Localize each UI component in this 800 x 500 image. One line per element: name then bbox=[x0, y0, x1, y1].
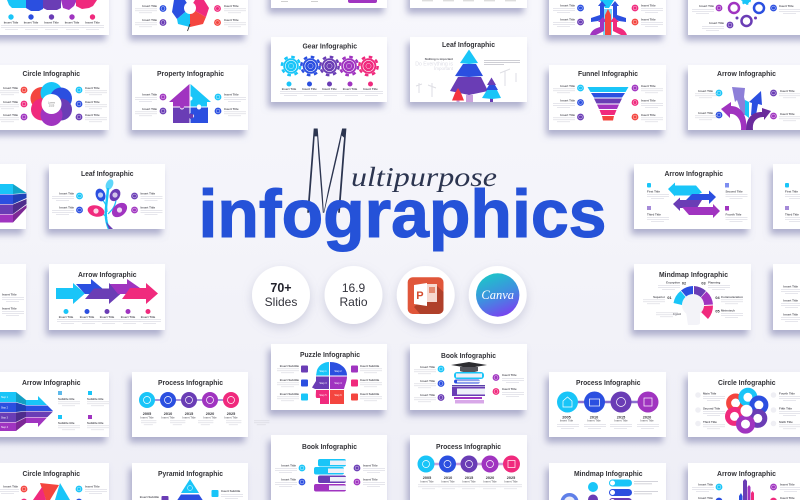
years and text: 2005 bbox=[423, 476, 431, 480]
left items: Insert Title bbox=[142, 92, 157, 96]
panel: top gear slide bbox=[688, 0, 800, 35]
left items: Second Title bbox=[703, 406, 721, 410]
items: Insert Title bbox=[85, 484, 100, 488]
pyramid labels bbox=[140, 489, 243, 500]
badge: Canva icon bbox=[469, 266, 527, 324]
years and text: 2020 bbox=[206, 412, 214, 416]
right items bbox=[771, 392, 800, 429]
puzzle labels: Insert Title bbox=[85, 20, 100, 24]
books and cap bbox=[451, 362, 487, 404]
wind turbines bbox=[416, 69, 516, 97]
badge: 70+ slides: Slides bbox=[265, 295, 297, 309]
right items: Insert Title bbox=[85, 100, 100, 104]
right items: Insert Title bbox=[641, 84, 656, 88]
panel: top partial slide 2 bbox=[410, 0, 527, 8]
head puzzle: Step 5 bbox=[319, 394, 327, 397]
item circles: Insert Title bbox=[779, 4, 794, 8]
items: Insert Title bbox=[780, 496, 795, 500]
years and text: 2020 bbox=[643, 416, 651, 420]
upward bars bbox=[739, 479, 754, 500]
chevron labels: Insert Title bbox=[121, 315, 136, 319]
heading: Process Infographic bbox=[158, 378, 223, 387]
left items: Insert Title bbox=[560, 4, 575, 8]
panel: process infographic 4 steps bbox=[549, 372, 666, 437]
strip labels: Insert Title bbox=[783, 284, 798, 288]
right items: Insert Subtitle bbox=[360, 364, 380, 368]
chevron labels: Insert Title bbox=[100, 315, 115, 319]
donut labels: Communication bbox=[721, 295, 743, 299]
head puzzle: Step 2 bbox=[334, 370, 342, 373]
panel: top puzzle slide bbox=[0, 0, 109, 35]
left items bbox=[695, 392, 725, 429]
badge: 16.9 ratio: Ratio bbox=[339, 295, 368, 309]
subtitle items: Subtitle title bbox=[87, 397, 104, 401]
strip labels: Insert Title bbox=[2, 292, 17, 296]
panel: bottom circle infographic bbox=[0, 463, 109, 500]
step labels: Step 3 bbox=[1, 416, 9, 420]
heading: Property Infographic bbox=[157, 69, 224, 78]
right items bbox=[131, 192, 162, 215]
feature items: First Title bbox=[647, 190, 660, 194]
years and text: 2015 bbox=[465, 476, 473, 480]
right items bbox=[354, 464, 385, 487]
triangles bbox=[33, 483, 70, 500]
gear labels: Insert Title bbox=[343, 87, 358, 91]
layered block bbox=[0, 184, 26, 222]
donut labels bbox=[643, 280, 743, 318]
left items: Insert Title bbox=[142, 4, 157, 8]
donut labels: 04 bbox=[715, 296, 720, 300]
left items: Insert Title bbox=[420, 365, 435, 369]
left items: Insert Title bbox=[3, 113, 18, 117]
gears bbox=[729, 0, 764, 26]
right items: Insert Title bbox=[641, 98, 656, 102]
right items: Insert Title bbox=[780, 89, 795, 93]
title block bbox=[198, 98, 606, 252]
left items: Insert Title bbox=[560, 18, 575, 22]
left items bbox=[277, 364, 308, 401]
left items: Insert Title bbox=[142, 18, 157, 22]
left items: Insert Title bbox=[698, 111, 713, 115]
right items bbox=[493, 373, 524, 397]
right items: Insert Subtitle bbox=[360, 392, 380, 396]
gear labels: Insert Title bbox=[322, 87, 337, 91]
petal ring: 2025 bbox=[49, 104, 55, 108]
right items bbox=[214, 4, 246, 27]
years and text: 2015 bbox=[185, 412, 193, 416]
heading: Process Infographic bbox=[576, 378, 640, 387]
right items: Insert Title bbox=[85, 113, 100, 117]
house puzzle bbox=[169, 84, 211, 123]
panel: bottom process infographic bbox=[410, 435, 527, 500]
puzzle labels bbox=[1, 14, 104, 30]
funnel layers bbox=[588, 87, 628, 120]
left items: Insert Title bbox=[560, 98, 575, 102]
items: Insert Title bbox=[780, 482, 795, 486]
panel: book infographic with cap bbox=[410, 344, 527, 410]
chevron labels: Insert Title bbox=[141, 315, 156, 319]
heading: Circle Infographic bbox=[718, 378, 776, 387]
left items: Insert Subtitle bbox=[280, 392, 299, 396]
feature items: Third Title bbox=[647, 212, 661, 216]
left items bbox=[275, 464, 305, 487]
branching arrows bbox=[721, 87, 771, 130]
panel: top leaf slide bbox=[132, 0, 248, 35]
left items: Insert Title bbox=[3, 86, 18, 90]
item circles: Insert Title bbox=[709, 21, 724, 25]
book stack bbox=[314, 459, 346, 492]
left items: Insert Title bbox=[59, 206, 74, 210]
right copy bbox=[484, 60, 520, 65]
right items: Insert Title bbox=[224, 92, 239, 96]
strip items: First Title bbox=[785, 190, 798, 194]
pyramid labels: Insert Subtitle bbox=[221, 489, 241, 493]
left items: Insert Title bbox=[3, 100, 18, 104]
years and text: Insert Title bbox=[203, 416, 217, 420]
panel: process infographic 5 steps bbox=[132, 372, 269, 437]
panel: leaf infographic with trees bbox=[410, 37, 527, 102]
years and text: 2010 bbox=[164, 412, 172, 416]
badge: 16.9 ratio: 16.9 bbox=[342, 281, 366, 295]
right items: Insert Subtitle bbox=[360, 378, 380, 382]
panel: property infographic bbox=[132, 65, 248, 130]
main title: infographics bbox=[198, 176, 606, 252]
subtitle items: Subtitle title bbox=[58, 397, 75, 401]
heading: Leaf Infographic bbox=[442, 40, 495, 49]
left items bbox=[414, 365, 444, 402]
script capital M: M bbox=[304, 98, 348, 245]
puzzle labels: Insert Title bbox=[4, 20, 19, 24]
left copy: Nothing is important bbox=[425, 57, 453, 61]
years and text: Insert Title bbox=[462, 480, 476, 484]
badge: PowerPoint icon: P bbox=[416, 290, 424, 302]
left items bbox=[0, 86, 27, 122]
process circles bbox=[418, 456, 520, 472]
years and text: Insert Title bbox=[504, 480, 518, 484]
panel: arrow infographic, branching bbox=[688, 65, 800, 130]
donut labels: Planning bbox=[708, 280, 720, 284]
loop ring bbox=[728, 390, 766, 431]
left copy bbox=[415, 57, 454, 71]
left items: Insert Title bbox=[698, 89, 713, 93]
years and text: 2020 bbox=[486, 476, 494, 480]
years and text: Insert Title bbox=[614, 418, 628, 422]
strip labels: Insert Title bbox=[783, 298, 798, 302]
panel: mindmap infographic bbox=[634, 264, 751, 330]
process circles bbox=[139, 392, 239, 408]
left items: Insert Title bbox=[142, 107, 157, 111]
left items: Insert Title bbox=[420, 379, 435, 383]
mindmap nodes bbox=[560, 482, 598, 500]
years and text: Insert Title bbox=[441, 480, 455, 484]
left items bbox=[695, 89, 722, 120]
petal ring: Lorem bbox=[48, 102, 55, 104]
small right tree bbox=[482, 78, 501, 102]
donut labels: Agent bbox=[673, 312, 681, 316]
process circles bbox=[557, 392, 658, 412]
segmented leaf bbox=[172, 0, 209, 31]
years and text: 2015 bbox=[617, 416, 625, 420]
left items bbox=[135, 92, 166, 116]
years and text: Insert Title bbox=[224, 416, 238, 420]
left copy: Do Everything is bbox=[415, 62, 453, 68]
right items: Insert Title bbox=[224, 18, 239, 22]
right items: Insert Title bbox=[224, 107, 239, 111]
gear labels: Insert Title bbox=[302, 87, 317, 91]
panel: circle infographic bbox=[0, 65, 109, 130]
heading: Arrow Infographic bbox=[717, 469, 776, 478]
right items: Insert Title bbox=[502, 373, 517, 377]
years and text: Insert Title bbox=[420, 480, 434, 484]
right items: Sixth Title bbox=[779, 420, 793, 424]
right items: Insert Title bbox=[641, 113, 656, 117]
years and text: 2005 bbox=[562, 416, 571, 420]
years and text: 2010 bbox=[590, 416, 598, 420]
heading: Arrow Infographic bbox=[78, 270, 136, 279]
panel: bottom book infographic bbox=[271, 435, 387, 500]
opposing arrows bbox=[668, 182, 720, 218]
left items: Insert Subtitle bbox=[280, 378, 299, 382]
left items: Insert Title bbox=[420, 393, 435, 397]
years and text: Insert Title bbox=[560, 418, 574, 422]
strip labels: Insert Title bbox=[2, 306, 17, 310]
heading: Book Infographic bbox=[302, 442, 357, 451]
badge: 70+ slides bbox=[252, 266, 310, 324]
left items: Insert Title bbox=[59, 192, 74, 196]
donut labels: 03 bbox=[701, 282, 706, 286]
years and text: 2025 bbox=[507, 476, 515, 480]
strip items: Third Title bbox=[785, 212, 799, 216]
script remainder: ultipurpose bbox=[351, 162, 497, 192]
head puzzle bbox=[312, 362, 347, 404]
right items: Insert Title bbox=[363, 478, 378, 482]
right items bbox=[770, 89, 800, 121]
donut labels: 01 bbox=[667, 296, 672, 300]
puzzle labels: Insert Title bbox=[44, 20, 59, 24]
panel: left strip with labels bbox=[0, 264, 26, 330]
left copy: Important bbox=[434, 66, 454, 71]
panel: puzzle infographic head bbox=[271, 344, 387, 410]
strip labels: Insert Title bbox=[783, 312, 798, 316]
petal ring bbox=[30, 82, 72, 126]
chevron labels: Insert Title bbox=[80, 315, 95, 319]
years and text: Insert Title bbox=[640, 418, 654, 422]
donut labels: Exception bbox=[666, 280, 680, 284]
heading: Arrow Infographic bbox=[717, 69, 776, 78]
items: Insert Title bbox=[698, 482, 713, 486]
badge: Canva icon: Canva bbox=[481, 288, 514, 302]
head puzzle: Step 3 bbox=[319, 382, 327, 385]
step labels: Step 1 bbox=[1, 396, 9, 399]
donut segments bbox=[674, 286, 713, 325]
panel: leaf infographic with stem bbox=[49, 164, 165, 229]
main tree bbox=[450, 50, 488, 102]
step labels: Step 2 bbox=[1, 406, 9, 410]
feature items: Fourth Title bbox=[726, 212, 742, 216]
panel: left strip with layered block bbox=[0, 164, 26, 229]
subtitle items: Subtitle title bbox=[87, 421, 104, 425]
right items: Insert Title bbox=[140, 206, 155, 210]
panel: right strip with icons bbox=[773, 164, 800, 229]
years and text: Insert Title bbox=[161, 416, 175, 420]
heading: Puzzle Infographic bbox=[300, 350, 360, 359]
head puzzle: Step 6 bbox=[334, 394, 342, 397]
subtitle items bbox=[58, 391, 109, 430]
years and text: 2010 bbox=[444, 476, 452, 480]
panel: funnel infographic bbox=[549, 65, 666, 130]
years and text bbox=[418, 476, 522, 489]
panel: circle infographic loops bbox=[688, 372, 800, 437]
left items: Insert Title bbox=[281, 478, 296, 482]
donut labels: 02 bbox=[682, 282, 686, 286]
heading: Gear Infographic bbox=[302, 42, 357, 50]
panel: pyramid infographic bbox=[132, 463, 248, 500]
heading: Leaf Infographic bbox=[81, 169, 134, 178]
right items: Insert Title bbox=[85, 86, 100, 90]
right items: Fifth Title bbox=[779, 406, 792, 410]
right items: Insert Title bbox=[224, 4, 239, 8]
items: Insert Title bbox=[698, 496, 713, 500]
mindmap pills bbox=[609, 480, 658, 500]
years and text bbox=[140, 412, 269, 425]
heading: Arrow Infographic bbox=[22, 378, 80, 387]
right items: Fourth Title bbox=[779, 392, 795, 396]
panel: top arrow slide bbox=[549, 0, 666, 35]
left items: Insert Title bbox=[281, 464, 296, 468]
heading: Book Infographic bbox=[441, 351, 496, 360]
left items bbox=[52, 192, 83, 215]
puzzle labels: Insert Title bbox=[24, 20, 39, 24]
right items: Insert Title bbox=[363, 464, 378, 468]
left items: Insert Title bbox=[560, 84, 575, 88]
donut labels: Metrotech bbox=[721, 308, 735, 312]
right items: Insert Title bbox=[780, 112, 795, 116]
right items bbox=[215, 92, 246, 116]
merging arrow bbox=[0, 392, 53, 431]
item circles: Insert Title bbox=[699, 4, 714, 8]
plant bbox=[86, 178, 130, 229]
heading: Arrow Infographic bbox=[664, 169, 723, 178]
heading: Circle Infographic bbox=[22, 469, 80, 478]
right items: Insert Title bbox=[641, 18, 656, 22]
step labels bbox=[1, 396, 9, 429]
pyramid labels: Insert Subtitle bbox=[140, 495, 159, 499]
panel: arrow infographic, chevrons bbox=[49, 264, 165, 330]
feature items: Second Title bbox=[726, 190, 743, 194]
panel: arrow infographic, opposing bbox=[634, 164, 751, 229]
panel: gear infographic bbox=[271, 37, 387, 102]
badge: PowerPoint icon bbox=[397, 266, 455, 324]
years and text: Insert Title bbox=[140, 416, 154, 420]
gear labels: Insert Title bbox=[282, 87, 297, 91]
left items: Insert Subtitle bbox=[280, 364, 299, 368]
left items bbox=[135, 4, 166, 27]
chevron labels bbox=[57, 309, 161, 324]
years and text bbox=[557, 416, 659, 429]
years and text: 2025 bbox=[227, 412, 235, 416]
panel: arrow infographic, merging layers bbox=[0, 372, 109, 437]
head puzzle: Step 1 bbox=[319, 370, 327, 373]
gear labels bbox=[280, 82, 383, 96]
feature items bbox=[647, 183, 748, 222]
left items: Insert Title bbox=[560, 113, 575, 117]
right items bbox=[76, 86, 107, 122]
items bbox=[0, 484, 107, 500]
strip labels bbox=[2, 292, 24, 316]
panel: right strip with labels bbox=[773, 264, 800, 330]
strip labels bbox=[781, 284, 800, 322]
years and text: 2005 bbox=[143, 412, 151, 416]
chevron arrows bbox=[56, 279, 158, 304]
puzzle labels: Insert Title bbox=[65, 20, 80, 24]
item circles bbox=[692, 4, 800, 31]
right items: Insert Title bbox=[641, 4, 656, 8]
items: Insert Title bbox=[3, 484, 18, 488]
donut labels: Superior bbox=[653, 295, 666, 299]
pyramid bbox=[176, 479, 204, 500]
donut labels: 05 bbox=[715, 310, 720, 314]
badge: 70+ slides: 70+ bbox=[270, 281, 292, 295]
left items bbox=[553, 84, 584, 122]
heading: Mindmap Infographic bbox=[574, 469, 643, 478]
head puzzle: Step 4 bbox=[334, 382, 342, 385]
gear labels: Insert Title bbox=[363, 87, 378, 91]
small left tree bbox=[452, 88, 464, 102]
panel: bottom mindmap infographic bbox=[549, 463, 666, 500]
heading: Funnel Infographic bbox=[578, 69, 638, 78]
gears row bbox=[282, 57, 378, 75]
left items bbox=[553, 4, 584, 27]
right items bbox=[351, 364, 382, 401]
heading: Circle Infographic bbox=[22, 69, 80, 78]
step labels: Step 4 bbox=[1, 426, 9, 429]
partial labels bbox=[422, 0, 516, 2]
panel: bottom arrow infographic bars bbox=[688, 463, 800, 500]
chevron labels: Insert Title bbox=[59, 315, 74, 319]
panel: top partial slide bbox=[271, 0, 387, 8]
right items bbox=[632, 84, 663, 122]
left items: Third Title bbox=[703, 420, 717, 424]
subtitle items: Subtitle title bbox=[58, 421, 75, 425]
years and text: Insert Title bbox=[182, 416, 196, 420]
years and text: Insert Title bbox=[587, 418, 601, 422]
heading: Pyramid Infographic bbox=[158, 469, 223, 478]
right items bbox=[632, 4, 663, 27]
partial chart bbox=[281, 0, 377, 3]
puzzle pieces bbox=[7, 0, 97, 11]
heading: Mindmap Infographic bbox=[659, 270, 728, 279]
left items: Main Title bbox=[703, 392, 717, 396]
converging arrows bbox=[590, 0, 627, 35]
right items: Insert Title bbox=[140, 192, 155, 196]
strip items bbox=[785, 183, 800, 222]
right items: Insert Title bbox=[502, 387, 517, 391]
years and text: Insert Title bbox=[483, 480, 497, 484]
badge: 16.9 ratio bbox=[324, 266, 382, 324]
heading: Process Infographic bbox=[436, 442, 501, 451]
items bbox=[692, 482, 800, 500]
